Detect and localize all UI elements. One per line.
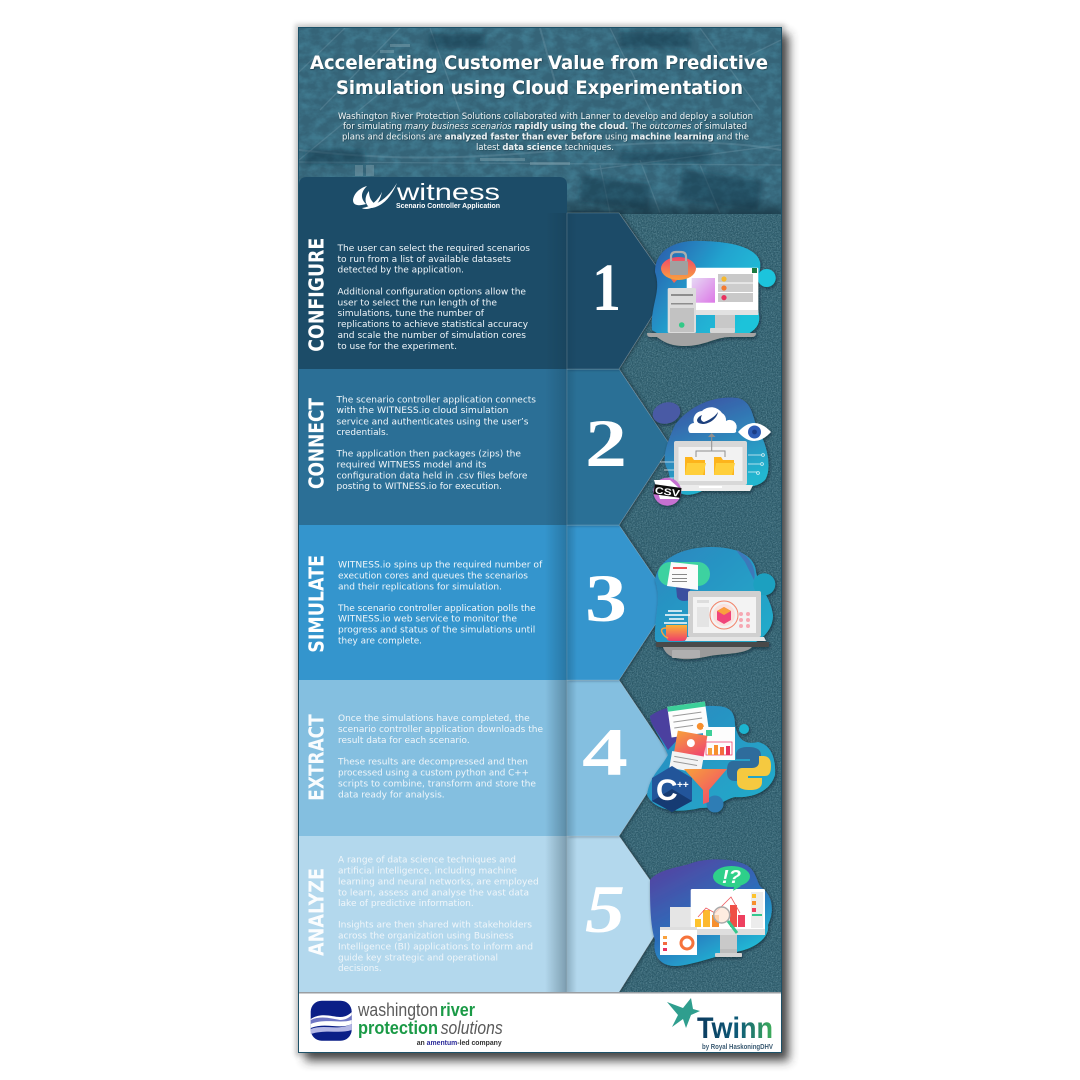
chevron 1 with number: 1 bbox=[592, 249, 621, 325]
text: simulate description bbox=[337, 560, 543, 646]
logo: washington river protection solutions: washington bbox=[357, 1000, 438, 1020]
text: connect description bbox=[335, 395, 536, 492]
text: connect description: required WITNESS model and its bbox=[336, 460, 487, 470]
panel: witness logo tab: Scenario Controller Application bbox=[396, 201, 500, 210]
text: connect description: configuration data held in .csv files before bbox=[336, 471, 528, 481]
chevron 4 with number bbox=[567, 680, 670, 836]
text: simulate description: execution cores and queues the scenarios bbox=[338, 571, 528, 581]
text: connect description: with the WITNESS.io cloud simulation bbox=[336, 406, 508, 416]
text: analyze description: Intelligence (BI) applications to inform and bbox=[338, 942, 533, 952]
text: analyze description: guide key strategic and operational bbox=[338, 953, 498, 963]
chevron 3 with number: 3 bbox=[585, 560, 627, 636]
intro text: latest data science techniques. bbox=[476, 143, 614, 153]
logo: washington river protection solutions bbox=[311, 1000, 503, 1047]
panel: footer logos bbox=[299, 992, 781, 1052]
heading: simulate: SIMULATE bbox=[304, 555, 328, 653]
chevron 5 with number bbox=[567, 836, 670, 992]
text: extract description: data ready for analysis. bbox=[338, 790, 445, 800]
intro text: plans and decisions are analyzed faster than ever before using machine learning and the bbox=[342, 132, 749, 142]
text: configure description: Additional configuration options allow the bbox=[338, 288, 526, 298]
text: simulate description: progress and status of the simulations until bbox=[338, 626, 535, 636]
chevron 3 with number bbox=[567, 525, 670, 680]
icon: connect laptop and cloud illustration: CSV bbox=[654, 485, 681, 500]
logo: washington river protection solutions: protection bbox=[358, 1018, 438, 1038]
panel: step 5 analyze bbox=[299, 836, 567, 992]
text: analyze description: lake of predictive information. bbox=[338, 899, 474, 909]
intro text bbox=[338, 112, 753, 153]
text: configure description: to run from a list of available datasets bbox=[338, 255, 511, 265]
infographic bbox=[293, 22, 798, 1070]
text: extract description: scenario controller application downloads the bbox=[338, 725, 543, 735]
text: configure description: to use for the experiment. bbox=[338, 342, 457, 352]
logo: twinn: Twinn bbox=[697, 1012, 773, 1045]
text: analyze description: Insights are then shared with stakeholders bbox=[338, 921, 532, 931]
logo: washington river protection solutions: river bbox=[440, 1000, 475, 1020]
text: simulate description: and their replications for simulation. bbox=[338, 582, 502, 592]
text: simulate description: WITNESS.io spins up the required number of bbox=[338, 560, 543, 570]
chevron 4 with number: 4 bbox=[582, 714, 628, 790]
panel: witness logo tab bbox=[299, 177, 567, 213]
chevron 5 with number: 5 bbox=[585, 871, 625, 947]
intro text: Washington River Protection Solutions collaborated with Lanner to develop and deploy a solution bbox=[338, 112, 753, 122]
text: extract description: These results are decompressed and then bbox=[337, 758, 528, 768]
icon: simulate laptop illustration bbox=[655, 547, 775, 659]
text: analyze description bbox=[338, 856, 539, 974]
panel: step 4 extract bbox=[299, 680, 567, 836]
text: simulate description: they are complete. bbox=[338, 636, 422, 646]
drop shadow of the poster bbox=[295, 24, 789, 1061]
chevron 1 with number bbox=[567, 213, 670, 369]
text: connect description: posting to WITNESS.io for execution. bbox=[336, 482, 502, 492]
title: Simulation using Cloud Experimentation bbox=[336, 77, 743, 99]
heading: analyze: ANALYZE bbox=[304, 868, 328, 956]
title bbox=[310, 52, 768, 99]
panel: step 3 simulate bbox=[299, 525, 567, 680]
icon: extract data funnel illustration: C bbox=[656, 774, 678, 807]
panel: step 2 connect bbox=[299, 369, 567, 525]
text: analyze description: across the organization using Business bbox=[338, 932, 514, 942]
logo: washington river protection solutions: an amentum-led company bbox=[417, 1038, 502, 1047]
heading: configure: CONFIGURE bbox=[304, 238, 328, 352]
icon: twinn star bbox=[667, 998, 700, 1028]
logo: washington river protection solutions: solutions bbox=[441, 1018, 503, 1038]
text: analyze description: decisions. bbox=[338, 964, 382, 974]
text: configure description: The user can select the required scenarios bbox=[336, 244, 530, 254]
heading: extract: EXTRACT bbox=[304, 714, 328, 801]
text: extract description: Once the simulations have completed, the bbox=[338, 714, 530, 724]
heading: connect: CONNECT bbox=[304, 398, 328, 489]
text: simulate description: WITNESS.io web service to monitor the bbox=[338, 615, 517, 625]
text: connect description: The application then packages (zips) the bbox=[335, 449, 521, 459]
text: configure description: user to select the run length of the bbox=[338, 298, 497, 308]
panel: witness logo tab: witness bbox=[396, 179, 500, 205]
text: analyze description: learning and neural networks, are employed bbox=[338, 877, 539, 887]
text: extract description: processed using a custom python and C++ bbox=[338, 768, 529, 778]
icon: analyze dashboard illustration bbox=[650, 859, 772, 966]
text: configure description bbox=[336, 244, 530, 352]
icon: river waves bbox=[311, 1001, 352, 1041]
logo: twinn bbox=[667, 998, 773, 1051]
panel: step 1 configure bbox=[299, 213, 567, 369]
icon: analyze dashboard illustration: !? bbox=[722, 867, 741, 887]
text: simulate description: The scenario controller application polls the bbox=[337, 604, 536, 614]
text: extract description bbox=[337, 714, 543, 800]
header: aerial photo background bbox=[299, 28, 781, 214]
icon: witness swoosh bbox=[353, 183, 397, 209]
icon: extract data funnel illustration: ++ bbox=[677, 780, 689, 791]
intro text: for simulating many business scenarios rapidly using the cloud. The outcomes of simulated bbox=[343, 122, 747, 132]
text: connect description: service and authenticates using the user’s bbox=[336, 417, 529, 427]
text: configure description: replications to achieve statistical accuracy bbox=[338, 320, 528, 330]
logo: twinn: by Royal HaskoningDHV bbox=[702, 1042, 773, 1051]
text: analyze description: to learn, assess and analyse the vast data bbox=[338, 888, 529, 898]
text: analyze description: artificial intelligence, including machine bbox=[338, 867, 517, 877]
text: configure description: simulations, tune the number of bbox=[338, 309, 485, 319]
text: connect description: The scenario controller application connects bbox=[335, 395, 536, 405]
text: configure description: detected by the application. bbox=[338, 266, 464, 276]
text: extract description: scripts to combine, transform and store the bbox=[338, 779, 536, 789]
title: Accelerating Customer Value from Predictive bbox=[310, 52, 768, 74]
chevron 2 with number: 2 bbox=[585, 405, 627, 481]
text: connect description: credentials. bbox=[336, 428, 388, 438]
text: extract description: result data for each scenario. bbox=[338, 736, 470, 746]
text: analyze description: A range of data science techniques and bbox=[338, 856, 516, 866]
text: configure description: and scale the number of simulation cores bbox=[338, 331, 526, 341]
icon: extract data funnel illustration bbox=[647, 701, 775, 812]
poster background bbox=[298, 27, 782, 1053]
icon: configure computer illustration bbox=[647, 241, 776, 346]
chevron 2 with number bbox=[567, 369, 670, 525]
icon: connect laptop and cloud illustration bbox=[650, 397, 771, 506]
